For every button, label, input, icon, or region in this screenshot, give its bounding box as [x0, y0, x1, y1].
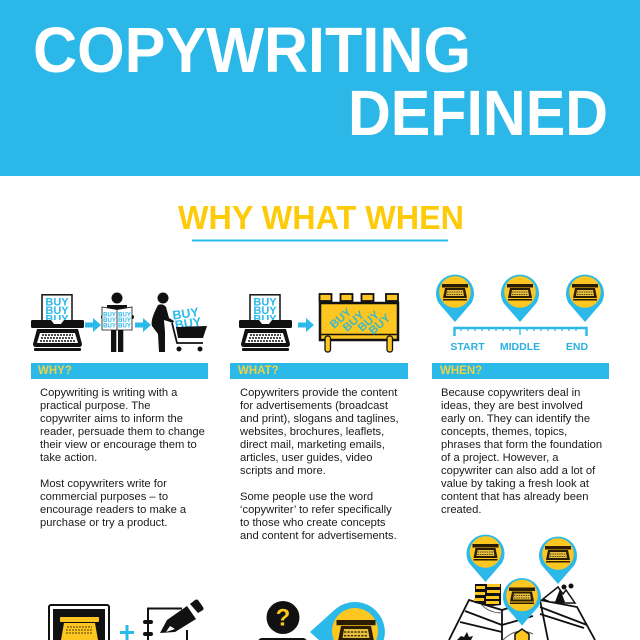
text block: why: reader, persuade them to change	[40, 426, 205, 438]
timeline labels: MIDDLE	[500, 341, 540, 353]
mountains	[543, 587, 575, 603]
text block: why: copywriter aims to inform the	[40, 413, 183, 425]
section heading: WHY WHAT WHEN	[178, 199, 464, 236]
text block: when: Because copywriters deal in	[441, 387, 580, 399]
text block: when: concepts, themes, topics,	[441, 426, 567, 438]
map lines	[449, 600, 595, 640]
icon: billboard: BUY	[356, 309, 382, 334]
title	[33, 14, 608, 149]
map pins	[466, 535, 504, 582]
icon: shopper with cart: BUY	[172, 305, 200, 323]
text block: what: ‘copywriter’ to refer specifically	[240, 504, 392, 516]
header banner	[0, 0, 640, 176]
text block: what: for advertisements (broadcast	[240, 400, 388, 412]
panel: when heading: WHEN?	[440, 365, 482, 377]
icon: typewriter (why)	[31, 295, 84, 351]
icons layer	[31, 274, 604, 640]
icon: person with question mark: ?	[276, 604, 290, 632]
icon: map with pins	[449, 535, 595, 640]
icon: arrow	[135, 318, 151, 332]
timeline labels: END	[566, 341, 589, 353]
text block: why: Most copywriters write for	[40, 478, 167, 490]
text block: what: websites, brochures, leaflets,	[240, 426, 384, 438]
title: COPYWRITING	[33, 14, 471, 86]
text block: why: commercial purposes – to	[40, 491, 168, 503]
text block: when: of a project. However, a	[441, 452, 559, 464]
text block: what: and print), slogans and taglines,	[240, 413, 399, 425]
text block: when: value by taking a fresh look at	[441, 478, 589, 490]
text block: when	[441, 387, 602, 516]
icon: shopper with cart	[152, 292, 207, 352]
icon: person reading: BUY	[118, 318, 131, 324]
text block: why: Copywriting is writing with a	[40, 387, 177, 399]
panel: when heading	[432, 363, 609, 379]
text block: what: and content for advertisements.	[240, 530, 397, 542]
icon: billboard: BUY	[367, 312, 393, 337]
text block: why: purchase or try a product.	[40, 517, 167, 529]
icon: location pins on timeline	[436, 275, 604, 353]
text block: when: content that has already been	[441, 491, 588, 503]
text block: what: Some people use the word	[240, 491, 373, 503]
text block: why: encourage readers to make a	[40, 504, 186, 516]
buildings	[474, 584, 501, 606]
text block: when: ideas, they are best involved	[441, 400, 583, 412]
text block: when: copywriter can also add a lot of	[441, 465, 595, 477]
title: DEFINED	[348, 77, 608, 149]
icon: person reading: BUY	[118, 312, 131, 318]
house	[515, 629, 529, 640]
text block: why: practical purpose. The	[40, 400, 150, 412]
icon: billboard: BUY	[341, 309, 367, 334]
text block: why: take action.	[40, 452, 97, 464]
panel: why heading: WHY?	[38, 365, 72, 377]
icon: person reading: BUY	[103, 312, 116, 318]
icon: person with question mark	[258, 601, 307, 640]
text block: why: their view or encourage them to	[40, 439, 197, 451]
icon: speech pin	[310, 602, 385, 640]
text block: when: created.	[441, 504, 481, 516]
icon: billboard: BUY	[328, 306, 354, 331]
icon: plus	[120, 625, 134, 640]
text block: what: to those who create concepts	[240, 517, 386, 529]
text block: when: early on. They can identify the	[441, 413, 590, 425]
icon: arrow	[298, 318, 314, 332]
text block: what: Copywriters provide the content	[240, 387, 397, 399]
panel: why heading	[31, 363, 208, 379]
icon: shopper with cart: BUY	[174, 315, 203, 332]
icon: person reading	[101, 292, 134, 352]
text block: when: phrases that form the foundation	[441, 439, 602, 451]
text block: what: scripts and more.	[240, 465, 326, 477]
timeline labels	[450, 341, 589, 353]
text block: what: direct mail, marketing emails,	[240, 439, 385, 451]
text block: what	[240, 387, 399, 542]
text block: why	[40, 387, 205, 529]
icon: notepad and pencil	[143, 600, 204, 640]
timeline labels: START	[450, 341, 485, 353]
panel: what heading	[230, 363, 408, 379]
icon: person reading: BUY	[118, 324, 131, 330]
icon: billboard	[320, 294, 398, 352]
icon: person reading: BUY	[103, 318, 116, 324]
icon: typewriter (what)	[239, 295, 292, 351]
icon: framed typewriter	[49, 605, 109, 640]
text block: what: articles, user guides, video	[240, 452, 372, 464]
panel: what heading: WHAT?	[238, 365, 279, 377]
icon: person reading: BUY	[103, 324, 116, 330]
icon: arrow	[85, 318, 101, 332]
